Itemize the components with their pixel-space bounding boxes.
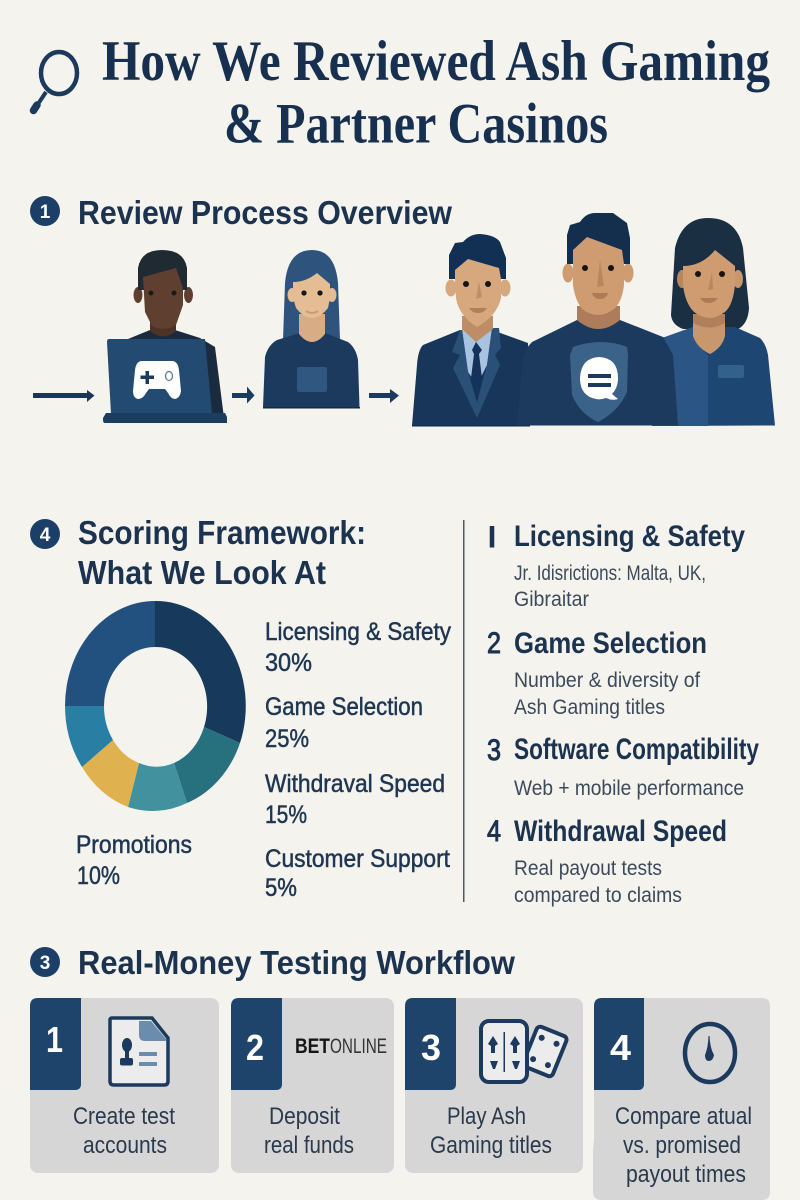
figure: female reviewer <box>263 250 360 408</box>
donut legend: Licensing & Safety <box>265 618 451 646</box>
arrow: laptop to reviewer <box>232 386 254 404</box>
heading: scoring framework: Scoring Framework: <box>78 514 366 551</box>
panel: step 2 deposit real funds: 2 <box>246 1027 264 1068</box>
panel: step 3 play ash gaming titles: Play Ash <box>447 1103 526 1130</box>
donut legend: Withdraval Speed <box>265 770 445 798</box>
heading: review process overview: 1 <box>40 202 51 223</box>
criteria list: 3 <box>487 734 501 767</box>
panel: step 3 play ash gaming titles: Gaming titles <box>430 1132 552 1159</box>
criteria list <box>487 520 759 907</box>
figure: reviewer at laptop <box>103 250 227 423</box>
criteria list: Number & diversity of <box>514 669 700 692</box>
panel: step 1 create test accounts: 1 <box>46 1019 63 1060</box>
logo: betonline: ONLINE <box>330 1035 387 1058</box>
panel: step 2 deposit real funds: Deposit <box>269 1103 340 1130</box>
title <box>102 30 770 156</box>
panel: step 4 compare payout times <box>593 998 770 1200</box>
criteria list: Licensing & Safety <box>514 520 745 553</box>
criteria list: Jr. Idisrictions: Malta, UK, <box>514 562 706 585</box>
laptop <box>103 339 227 423</box>
panel: step 1 create test accounts: Create test <box>73 1103 175 1130</box>
figure: man with chat badge <box>517 213 678 426</box>
arrow: reviewer to team <box>369 389 399 403</box>
panel: step 4 compare payout times: 4 <box>610 1027 631 1068</box>
criteria list: compared to claims <box>514 884 682 907</box>
heading: review process overview: Review Process Overview <box>78 194 452 231</box>
donut legend: Promotions <box>76 831 192 859</box>
panel: step 3 play ash gaming titles <box>405 998 583 1173</box>
heading: scoring framework: 4 <box>40 525 51 546</box>
icon: magnifying glass <box>34 52 77 110</box>
panel: step 1 create test accounts: accounts <box>83 1132 167 1159</box>
heading: scoring framework <box>30 514 366 591</box>
donut legend: 10% <box>77 862 120 890</box>
panel: step 4 compare payout times: vs. promised <box>623 1132 741 1159</box>
donut legend <box>76 618 451 902</box>
icon: cards and dice <box>481 1021 568 1082</box>
panel: step 2 deposit real funds <box>231 998 394 1173</box>
criteria list: Game Selection <box>514 627 707 660</box>
icon: id document <box>110 1018 168 1085</box>
donut legend: Customer Support <box>265 845 450 873</box>
donut legend: 5% <box>265 874 297 902</box>
figure: man in suit <box>412 234 532 426</box>
logo: betonline <box>295 1035 387 1058</box>
criteria list: 4 <box>487 815 501 848</box>
criteria list: Ash Gaming titles <box>514 696 665 719</box>
panel: step 4 compare payout times: payout times <box>626 1161 746 1188</box>
donut legend: 30% <box>265 649 312 677</box>
criteria list: Gibraitar <box>514 588 589 611</box>
heading: real-money testing workflow: 3 <box>40 953 50 974</box>
figure: woman in blue jacket <box>652 218 775 426</box>
donut legend: 15% <box>265 801 307 829</box>
criteria list: I <box>487 521 497 554</box>
icon: stopwatch <box>685 1024 735 1082</box>
donut chart <box>65 601 246 811</box>
heading: scoring framework: What We Look At <box>78 554 326 591</box>
criteria list: Web + mobile performance <box>514 777 744 800</box>
logo: betonline: BET <box>295 1035 330 1058</box>
donut legend: Game Selection <box>265 693 423 721</box>
panel: step 2 deposit real funds: real funds <box>264 1132 354 1159</box>
donut legend: 25% <box>265 725 309 753</box>
criteria list: Real payout tests <box>514 857 662 880</box>
criteria list: Withdrawal Speed <box>514 815 727 848</box>
icon: chat badge <box>570 342 628 422</box>
criteria list: 2 <box>487 627 501 660</box>
panel: step 3 play ash gaming titles: 3 <box>421 1027 441 1068</box>
heading: real-money testing workflow: Real-Money Testing Workflow <box>78 944 515 981</box>
title: & Partner Casinos <box>224 92 608 156</box>
icon: game controller <box>133 361 181 399</box>
panel: step 4 compare payout times: Compare atual <box>615 1103 752 1130</box>
arrow: into laptop <box>33 390 94 402</box>
panel: step 1 create test accounts <box>30 998 219 1173</box>
